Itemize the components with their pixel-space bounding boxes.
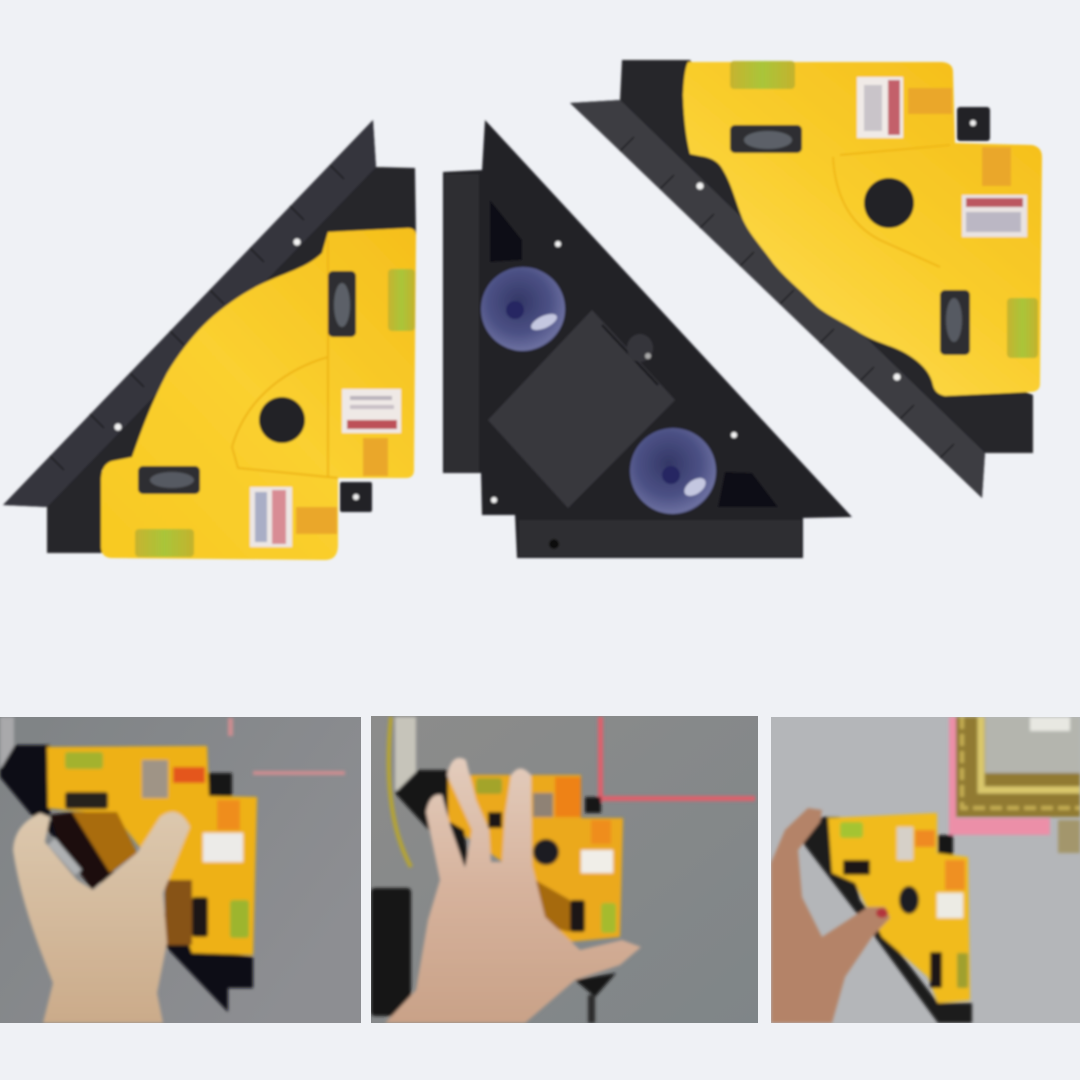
rear tab <box>938 835 953 855</box>
picture frame <box>956 717 1080 817</box>
grey label <box>533 793 553 817</box>
rear tab <box>957 107 990 141</box>
picture highlight <box>1030 717 1070 731</box>
laser aperture: right <box>363 438 388 476</box>
bubble vial: top <box>388 269 415 331</box>
laser aperture: bottom <box>296 507 337 534</box>
housing ridge <box>232 240 338 478</box>
screw holes <box>114 238 300 430</box>
laser glow <box>949 717 1050 835</box>
dark object at left <box>371 888 411 1016</box>
hand <box>13 812 190 1023</box>
yellow housing <box>101 228 416 560</box>
white label <box>203 833 243 862</box>
laser aperture: top <box>908 88 952 114</box>
recess: upper <box>490 200 522 262</box>
dial <box>259 397 305 443</box>
brown shade: lower <box>165 880 192 945</box>
brown shade <box>535 880 570 932</box>
black frame <box>0 745 253 1012</box>
black frame <box>394 768 452 830</box>
black strip between fingers <box>448 821 469 858</box>
picture interior <box>985 717 1080 773</box>
photo panel: tool held on wall, centre <box>371 716 758 1023</box>
laser window: top <box>730 125 802 153</box>
knob <box>627 334 653 362</box>
grey label <box>142 760 168 798</box>
frame bright band: outer <box>962 717 1080 808</box>
ruler ticks <box>620 137 954 458</box>
photo panel: tool held on wall, left <box>0 717 361 1023</box>
window: right <box>192 897 208 937</box>
warning label: bottom <box>250 487 292 547</box>
black foot <box>575 973 616 997</box>
ruler band <box>3 120 376 507</box>
side strip <box>445 174 479 472</box>
bubble vial <box>476 778 502 794</box>
warning label: top <box>857 77 903 138</box>
suction cup: lower <box>630 428 716 514</box>
rear tab <box>585 797 601 813</box>
label <box>897 827 913 860</box>
dial <box>864 178 914 228</box>
bubble vial: right <box>230 900 249 938</box>
suction cup: upper <box>481 267 565 351</box>
yellow housing <box>47 746 257 955</box>
window: top <box>65 792 108 809</box>
dial <box>533 839 559 865</box>
tool: right laser square front view <box>570 60 1042 498</box>
battery cover <box>488 310 675 508</box>
frame ornament <box>1058 820 1080 853</box>
hand <box>771 808 890 1023</box>
battery slot <box>602 325 658 385</box>
laser window: top <box>328 271 356 337</box>
window <box>843 860 870 875</box>
wall <box>0 717 361 1023</box>
bubble vial: bottom <box>135 529 194 557</box>
base hole <box>549 539 559 549</box>
laser window: bottom <box>138 466 200 494</box>
black frame <box>803 817 972 1023</box>
white label <box>581 850 613 873</box>
nail <box>876 908 888 918</box>
wall <box>771 717 1080 1023</box>
photo panel: tool under picture frame, right <box>771 717 1080 1023</box>
yellow housing <box>683 62 1042 396</box>
warning label: right <box>342 389 401 433</box>
screw holes <box>696 182 900 380</box>
yellow housing <box>448 775 623 942</box>
bubble vial: top <box>730 61 795 89</box>
yellow cable <box>389 717 411 867</box>
tool: left laser square front view <box>3 120 416 560</box>
wall <box>371 716 758 1023</box>
red aperture <box>173 767 205 783</box>
window: right <box>930 952 942 988</box>
black frame <box>570 60 1033 498</box>
aperture: right <box>945 860 965 890</box>
tool: middle laser square rear view <box>443 120 852 558</box>
frame bright band: inner <box>981 717 1080 790</box>
screw holes <box>491 241 737 503</box>
rear tab <box>340 482 372 512</box>
bottom strip <box>519 520 801 556</box>
shadow under hand <box>50 812 110 890</box>
yellow housing <box>828 813 970 1003</box>
orange aperture <box>555 777 581 817</box>
recess: lower <box>718 472 778 507</box>
hand <box>385 758 641 1023</box>
laser aperture: right <box>982 147 1011 186</box>
bubble vial: bottom <box>1007 298 1038 358</box>
black rod <box>588 995 595 1023</box>
shaded housing section <box>72 812 137 873</box>
aperture: right <box>217 800 240 830</box>
window: top <box>488 812 502 828</box>
laser lines <box>598 717 755 802</box>
laser window: bottom <box>940 290 970 355</box>
black triangular body <box>443 120 852 558</box>
black frame <box>3 120 416 553</box>
white label <box>937 893 963 918</box>
bubble vial <box>840 822 863 838</box>
ruler band <box>570 100 985 498</box>
pale wall patch <box>0 717 14 767</box>
ruler ticks <box>50 165 344 470</box>
bubble vial: right <box>601 903 616 933</box>
housing ridge <box>833 145 950 267</box>
pale strip <box>395 717 416 790</box>
rear tab <box>208 773 232 797</box>
warning label: right <box>962 195 1027 237</box>
aperture <box>915 830 935 847</box>
bubble vial: top <box>65 752 103 769</box>
aperture: right <box>591 820 611 844</box>
grey gap behind hand <box>48 838 82 875</box>
window: right <box>570 900 585 932</box>
bubble vial: right <box>957 953 968 988</box>
dial <box>899 886 919 914</box>
laser lines <box>228 718 345 775</box>
